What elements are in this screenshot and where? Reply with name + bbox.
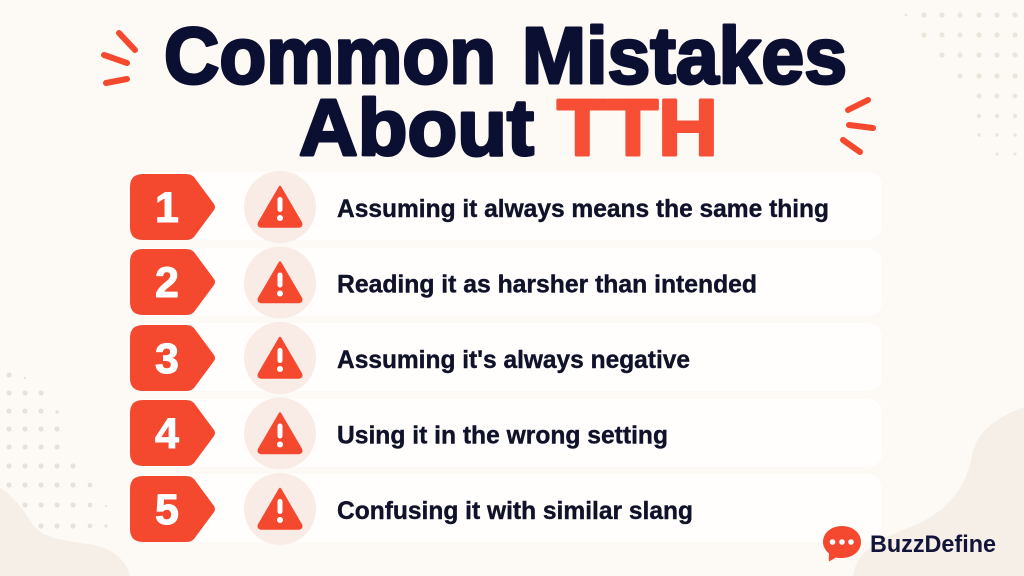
row panel [130,248,882,316]
row text: Assuming it always means the same thing [337,195,829,223]
icon: warning triangle [259,262,301,302]
row text: Assuming it's always negative [337,346,690,374]
icon circle [244,398,316,470]
icon circle [244,473,316,545]
row panel [130,172,882,240]
row 4 [130,398,882,470]
row 3 [130,322,882,394]
row panel [130,323,882,391]
icon: warning triangle [259,187,301,226]
title word: Common: Common [164,11,496,100]
logo text: BuzzDefine [870,531,996,558]
number badge 4 [130,400,215,466]
title word: Mistakes: Mistakes [522,11,847,100]
number 4: 4 [155,410,179,458]
number badge 2 [130,249,215,315]
row text: Using it in the wrong setting [337,422,668,450]
row 2 [130,246,882,318]
row text: Reading it as harsher than intended [337,270,757,298]
logo [823,526,996,562]
number 5: 5 [155,486,179,534]
number badge 5 [130,476,215,542]
dot pattern: bottom left [6,372,108,529]
row 5 [130,473,882,545]
icon circle [244,171,316,243]
number 1: 1 [155,184,179,232]
background blob: bottom left [0,488,130,576]
title word: About: About [299,83,534,172]
title [164,11,847,172]
icon: warning triangle [259,489,301,528]
number 2: 2 [155,259,179,307]
icon circle [244,322,316,394]
dot pattern: top right [904,12,1018,156]
title word: TTH: TTH [557,83,718,172]
number badge 3 [130,325,215,391]
number badge 1 [130,174,215,240]
row 1 [130,171,882,243]
icon: warning triangle [259,338,301,378]
row panel [130,474,882,542]
icon: right sparks [843,100,873,152]
number 3: 3 [155,335,179,383]
row text: Confusing it with similar slang [337,497,693,525]
row panel [130,399,882,467]
icon: speech bubble [823,526,861,562]
icon: warning triangle [259,414,301,453]
background blob: bottom right [853,407,1024,576]
icon: left sparks [104,33,135,83]
icon circle [244,246,316,318]
